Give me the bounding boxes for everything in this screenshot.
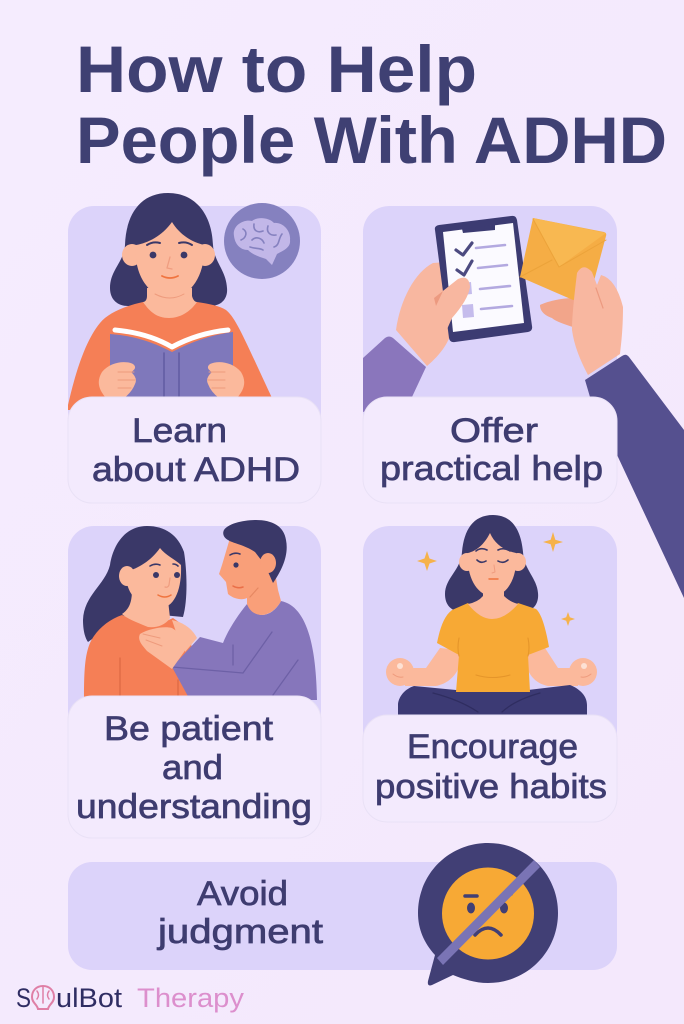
logo: SoulBot Therapy — [16, 983, 245, 1013]
logo: SoulBot Therapy: ulBot — [56, 983, 123, 1013]
label: learn about ADHD: Learn — [132, 412, 227, 450]
label: encourage positive habits: positive habits — [375, 768, 607, 806]
label: encourage positive habits — [363, 715, 617, 822]
label: be patient and understanding: and — [162, 749, 223, 787]
label: encourage positive habits: Encourage — [407, 728, 578, 766]
title: People With ADHD — [76, 103, 667, 177]
figure: woman reading — [68, 193, 272, 410]
label: offer practical help: practical help — [380, 450, 603, 488]
label: offer practical help: Offer — [450, 412, 538, 450]
figure: dark sleeve — [585, 355, 684, 598]
label: offer practical help — [363, 397, 617, 503]
envelope — [520, 218, 606, 300]
figure: right hand holding envelope — [520, 218, 623, 375]
icon: brain in circle — [224, 203, 300, 279]
panel: avoid judgment — [68, 843, 617, 986]
label: be patient and understanding — [68, 696, 321, 838]
logo: SoulBot Therapy: S — [16, 983, 31, 1013]
title: How to Help — [76, 32, 477, 106]
label: avoid judgment — [157, 875, 324, 951]
panel: offer practical help — [363, 206, 684, 598]
label: learn about ADHD: about ADHD — [92, 451, 300, 489]
label: be patient and understanding: understanding — [76, 788, 312, 826]
panel: encourage positive habits — [363, 515, 617, 822]
figure: meditating woman — [386, 515, 597, 716]
figure: woman — [83, 526, 196, 698]
figure: man — [139, 520, 317, 700]
label: learn about ADHD — [68, 397, 321, 503]
icon: crossed-out frowning face in speech bubble — [418, 843, 558, 986]
title — [76, 32, 667, 177]
hand on shoulder — [139, 620, 197, 669]
panel: be patient and understanding — [68, 520, 321, 838]
icon: brain logo — [32, 986, 54, 1009]
label: avoid judgment: Avoid — [197, 875, 288, 913]
label: be patient and understanding: Be patient — [104, 710, 274, 748]
checklist phone — [435, 216, 532, 342]
label: avoid judgment: judgment — [157, 913, 324, 951]
figure: left hand holding checklist — [363, 216, 532, 412]
logo: SoulBot Therapy: Therapy — [137, 983, 245, 1013]
panel: learn about ADHD — [68, 193, 321, 503]
icon: sparkles — [417, 532, 575, 626]
